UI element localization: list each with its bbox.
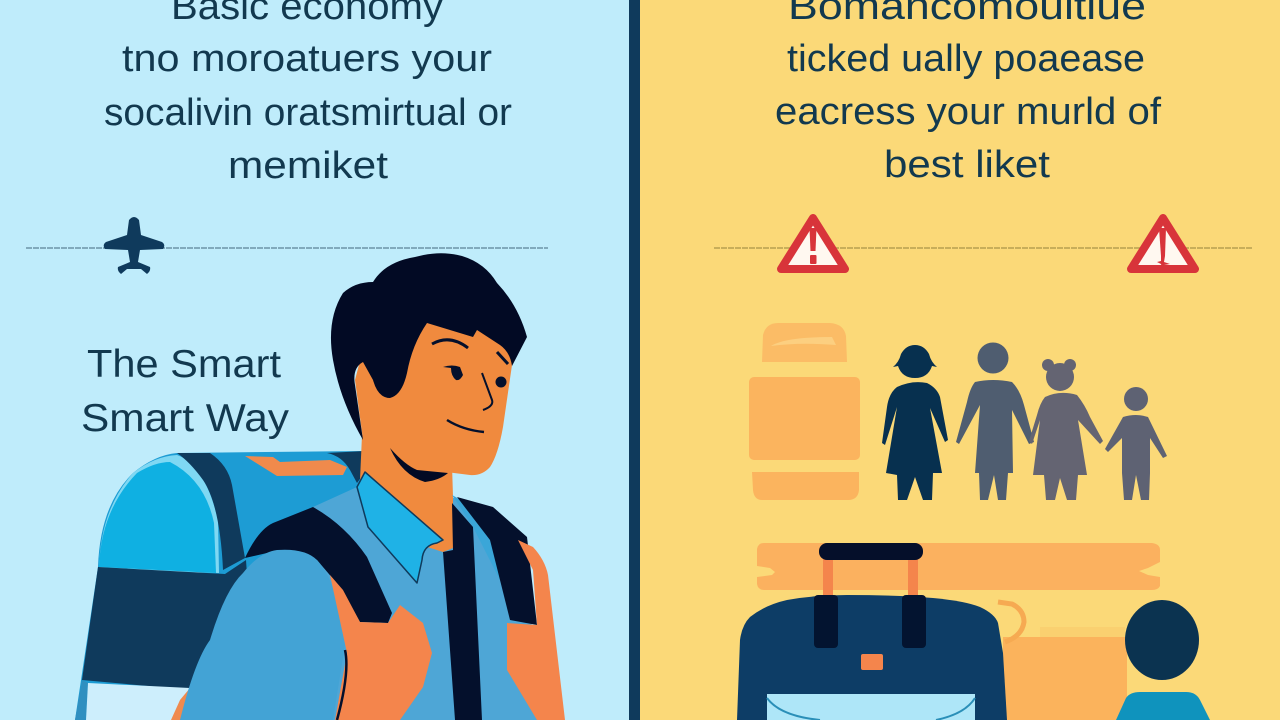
left heading text xyxy=(104,0,512,187)
collar xyxy=(357,472,443,583)
suitcase body xyxy=(737,595,1007,720)
horizontal band xyxy=(82,560,250,690)
nose xyxy=(482,373,492,410)
left heading text: socalivin oratsmirtual or xyxy=(104,92,512,134)
luggage body xyxy=(749,377,860,460)
vertical strap xyxy=(177,453,245,570)
center strap xyxy=(443,503,482,720)
left heading text: tno moroatuers your xyxy=(122,38,492,80)
shirt xyxy=(180,487,537,720)
center divider xyxy=(629,0,640,720)
clips xyxy=(814,595,838,648)
side edge xyxy=(75,680,88,720)
left strap xyxy=(245,507,392,623)
right heading text: ticked ually poaease xyxy=(787,38,1145,80)
panel: right background xyxy=(640,0,1280,720)
orange patch xyxy=(245,456,347,476)
white pocket xyxy=(86,683,190,720)
right arm xyxy=(507,540,565,720)
eyebrow right xyxy=(497,352,508,364)
orange tag xyxy=(861,654,883,670)
smile xyxy=(447,420,484,432)
eyebrow left xyxy=(432,340,468,348)
right heading text xyxy=(775,0,1161,186)
tagline: The Smart Smart Way: The Smart xyxy=(87,343,281,386)
right strap xyxy=(457,497,537,625)
right dashed line xyxy=(714,247,1253,249)
illustration: traveler figure xyxy=(180,253,565,720)
icon: warning triangle right xyxy=(1131,218,1195,269)
illustration: family silhouettes xyxy=(882,342,1167,500)
illustration: orange lower box xyxy=(1003,627,1127,720)
illustration: child at bottom right xyxy=(1116,600,1210,720)
icon: airplane xyxy=(104,217,164,274)
orange sliver xyxy=(171,688,190,720)
right collar edge xyxy=(452,495,505,590)
dark top corner xyxy=(327,451,365,483)
illustration: cord loop xyxy=(998,602,1024,642)
illustration: backpack xyxy=(75,451,365,720)
luggage top xyxy=(762,323,847,362)
man xyxy=(956,342,1034,500)
neck xyxy=(360,435,453,552)
eye left xyxy=(443,366,463,380)
left heading text: memiket xyxy=(228,145,388,187)
panel: left background xyxy=(0,0,629,720)
illustration: orange shelf band xyxy=(757,543,1160,590)
child xyxy=(1105,387,1167,500)
front pocket xyxy=(767,694,975,720)
handle stems xyxy=(823,558,833,598)
illustration: faded luggage icon xyxy=(749,323,860,500)
backpack body xyxy=(75,451,364,720)
handle bar xyxy=(819,543,923,560)
luggage highlight xyxy=(771,337,836,346)
tagline: The Smart Smart Way xyxy=(81,343,290,440)
light rim xyxy=(99,455,219,573)
icon: warning triangle left xyxy=(781,218,845,269)
left arm sleeve xyxy=(180,550,345,720)
right heading text: best liket xyxy=(884,144,1050,186)
finger line xyxy=(337,650,346,720)
face xyxy=(355,305,514,475)
left dashed line xyxy=(26,247,548,249)
pocket flap xyxy=(767,698,975,720)
bright front panel xyxy=(99,462,216,573)
chin shadow xyxy=(390,448,448,482)
tagline: The Smart Smart Way: Smart Way xyxy=(81,397,290,440)
eye right xyxy=(496,376,506,388)
hand xyxy=(330,575,432,720)
illustration: rolling suitcase xyxy=(737,543,1007,720)
hair xyxy=(331,253,527,440)
girl xyxy=(1029,359,1103,500)
luggage base xyxy=(752,472,859,500)
woman xyxy=(882,345,948,500)
right heading text: eacress your murld of xyxy=(775,91,1161,133)
